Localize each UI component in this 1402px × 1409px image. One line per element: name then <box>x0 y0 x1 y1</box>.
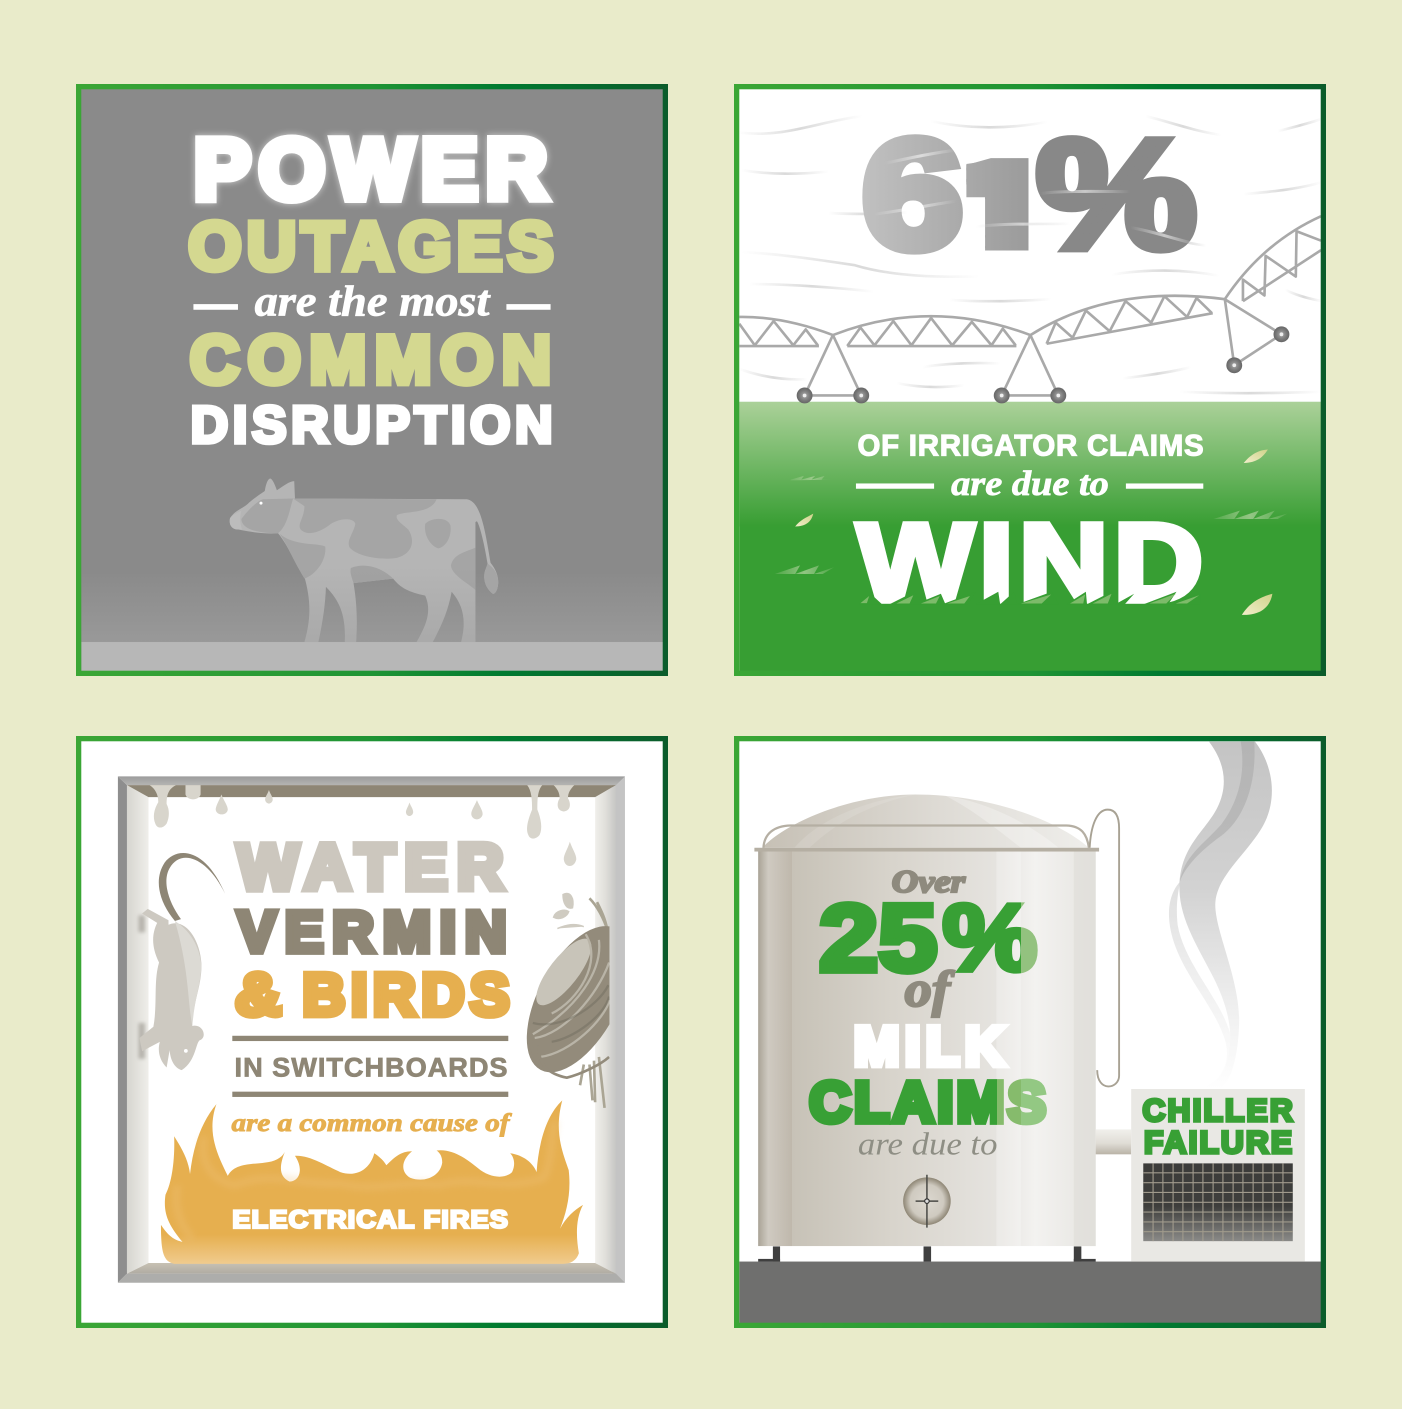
text: are due to: are due to <box>951 464 1109 503</box>
heading: water: WATER <box>238 831 503 903</box>
icon: flames <box>161 1100 583 1264</box>
statistic: 25% <box>819 886 1038 991</box>
text: milk: MILK <box>854 1016 1004 1077</box>
statistic: 61%: % <box>1036 107 1197 281</box>
panel: milk chiller failure <box>737 739 1323 1325</box>
text: chiller failure <box>1143 1092 1293 1160</box>
heading: power: POWER <box>194 121 547 216</box>
smoke <box>1169 742 1272 1089</box>
statistic: 25%: % <box>942 886 1038 991</box>
infographic: four claim panels <box>76 84 1326 1328</box>
heading: wind: WIND <box>857 501 1203 624</box>
heading: common: COMMON <box>190 322 551 398</box>
connecting pipe <box>1096 1129 1131 1154</box>
text: are due to: are due to <box>858 1126 998 1161</box>
heading: disruption: DISRUPTION <box>191 396 552 454</box>
panel: water vermin birds <box>79 739 665 1325</box>
text: over: Over <box>892 864 966 899</box>
icon: rat <box>138 853 225 1070</box>
text: are a common cause of: are a common cause of <box>232 1108 512 1137</box>
ground <box>739 1262 1321 1323</box>
text: of irrigator claims: OF IRRIGATOR CLAIMS <box>857 430 1204 463</box>
text: claims: CLAIMS <box>810 1070 1046 1134</box>
heading: outages: OUTAGES <box>189 209 553 285</box>
milk vat <box>754 795 1119 1262</box>
heading: power: POWER <box>194 121 547 216</box>
statistic: 61%: 1 <box>921 133 1086 276</box>
illustration: centre pivot irrigator <box>739 216 1321 395</box>
heading: and birds: & <box>235 961 281 1028</box>
text: electrical fires: ELECTRICAL FIRES <box>232 1205 508 1234</box>
statistic: 61% <box>862 134 1198 255</box>
icon: nest <box>526 892 610 1108</box>
decoration: grass tufts <box>775 476 1287 574</box>
text: chiller failure: CHILLER <box>1143 1092 1293 1128</box>
wind streaks <box>738 116 1322 393</box>
text: chiller failure: FAILURE <box>1144 1124 1292 1160</box>
subheading: are the most: are the most <box>255 277 491 325</box>
heading: and birds: BIRDS <box>303 961 509 1028</box>
text: in switchboards: IN SWITCHBOARDS <box>235 1052 508 1083</box>
switchboard frame <box>118 776 625 1283</box>
chiller unit <box>1131 1089 1305 1262</box>
icon: valve <box>903 1175 951 1228</box>
statistic: 61%: 6 <box>862 108 963 280</box>
subheading: are the most <box>193 277 551 325</box>
panel: power outages <box>79 87 665 673</box>
panel: irrigator wind <box>737 87 1323 673</box>
text: of: of <box>905 961 955 1017</box>
icon: cow <box>230 479 498 642</box>
text: in switchboards <box>232 1036 508 1097</box>
icon: water drips <box>150 785 576 866</box>
irrigator wheels <box>797 326 1289 403</box>
text: are due to <box>856 464 1203 503</box>
icon: leaves <box>795 449 1272 615</box>
heading: vermin: VERMIN <box>238 901 506 965</box>
statistic: 25%: 25 <box>819 886 937 991</box>
